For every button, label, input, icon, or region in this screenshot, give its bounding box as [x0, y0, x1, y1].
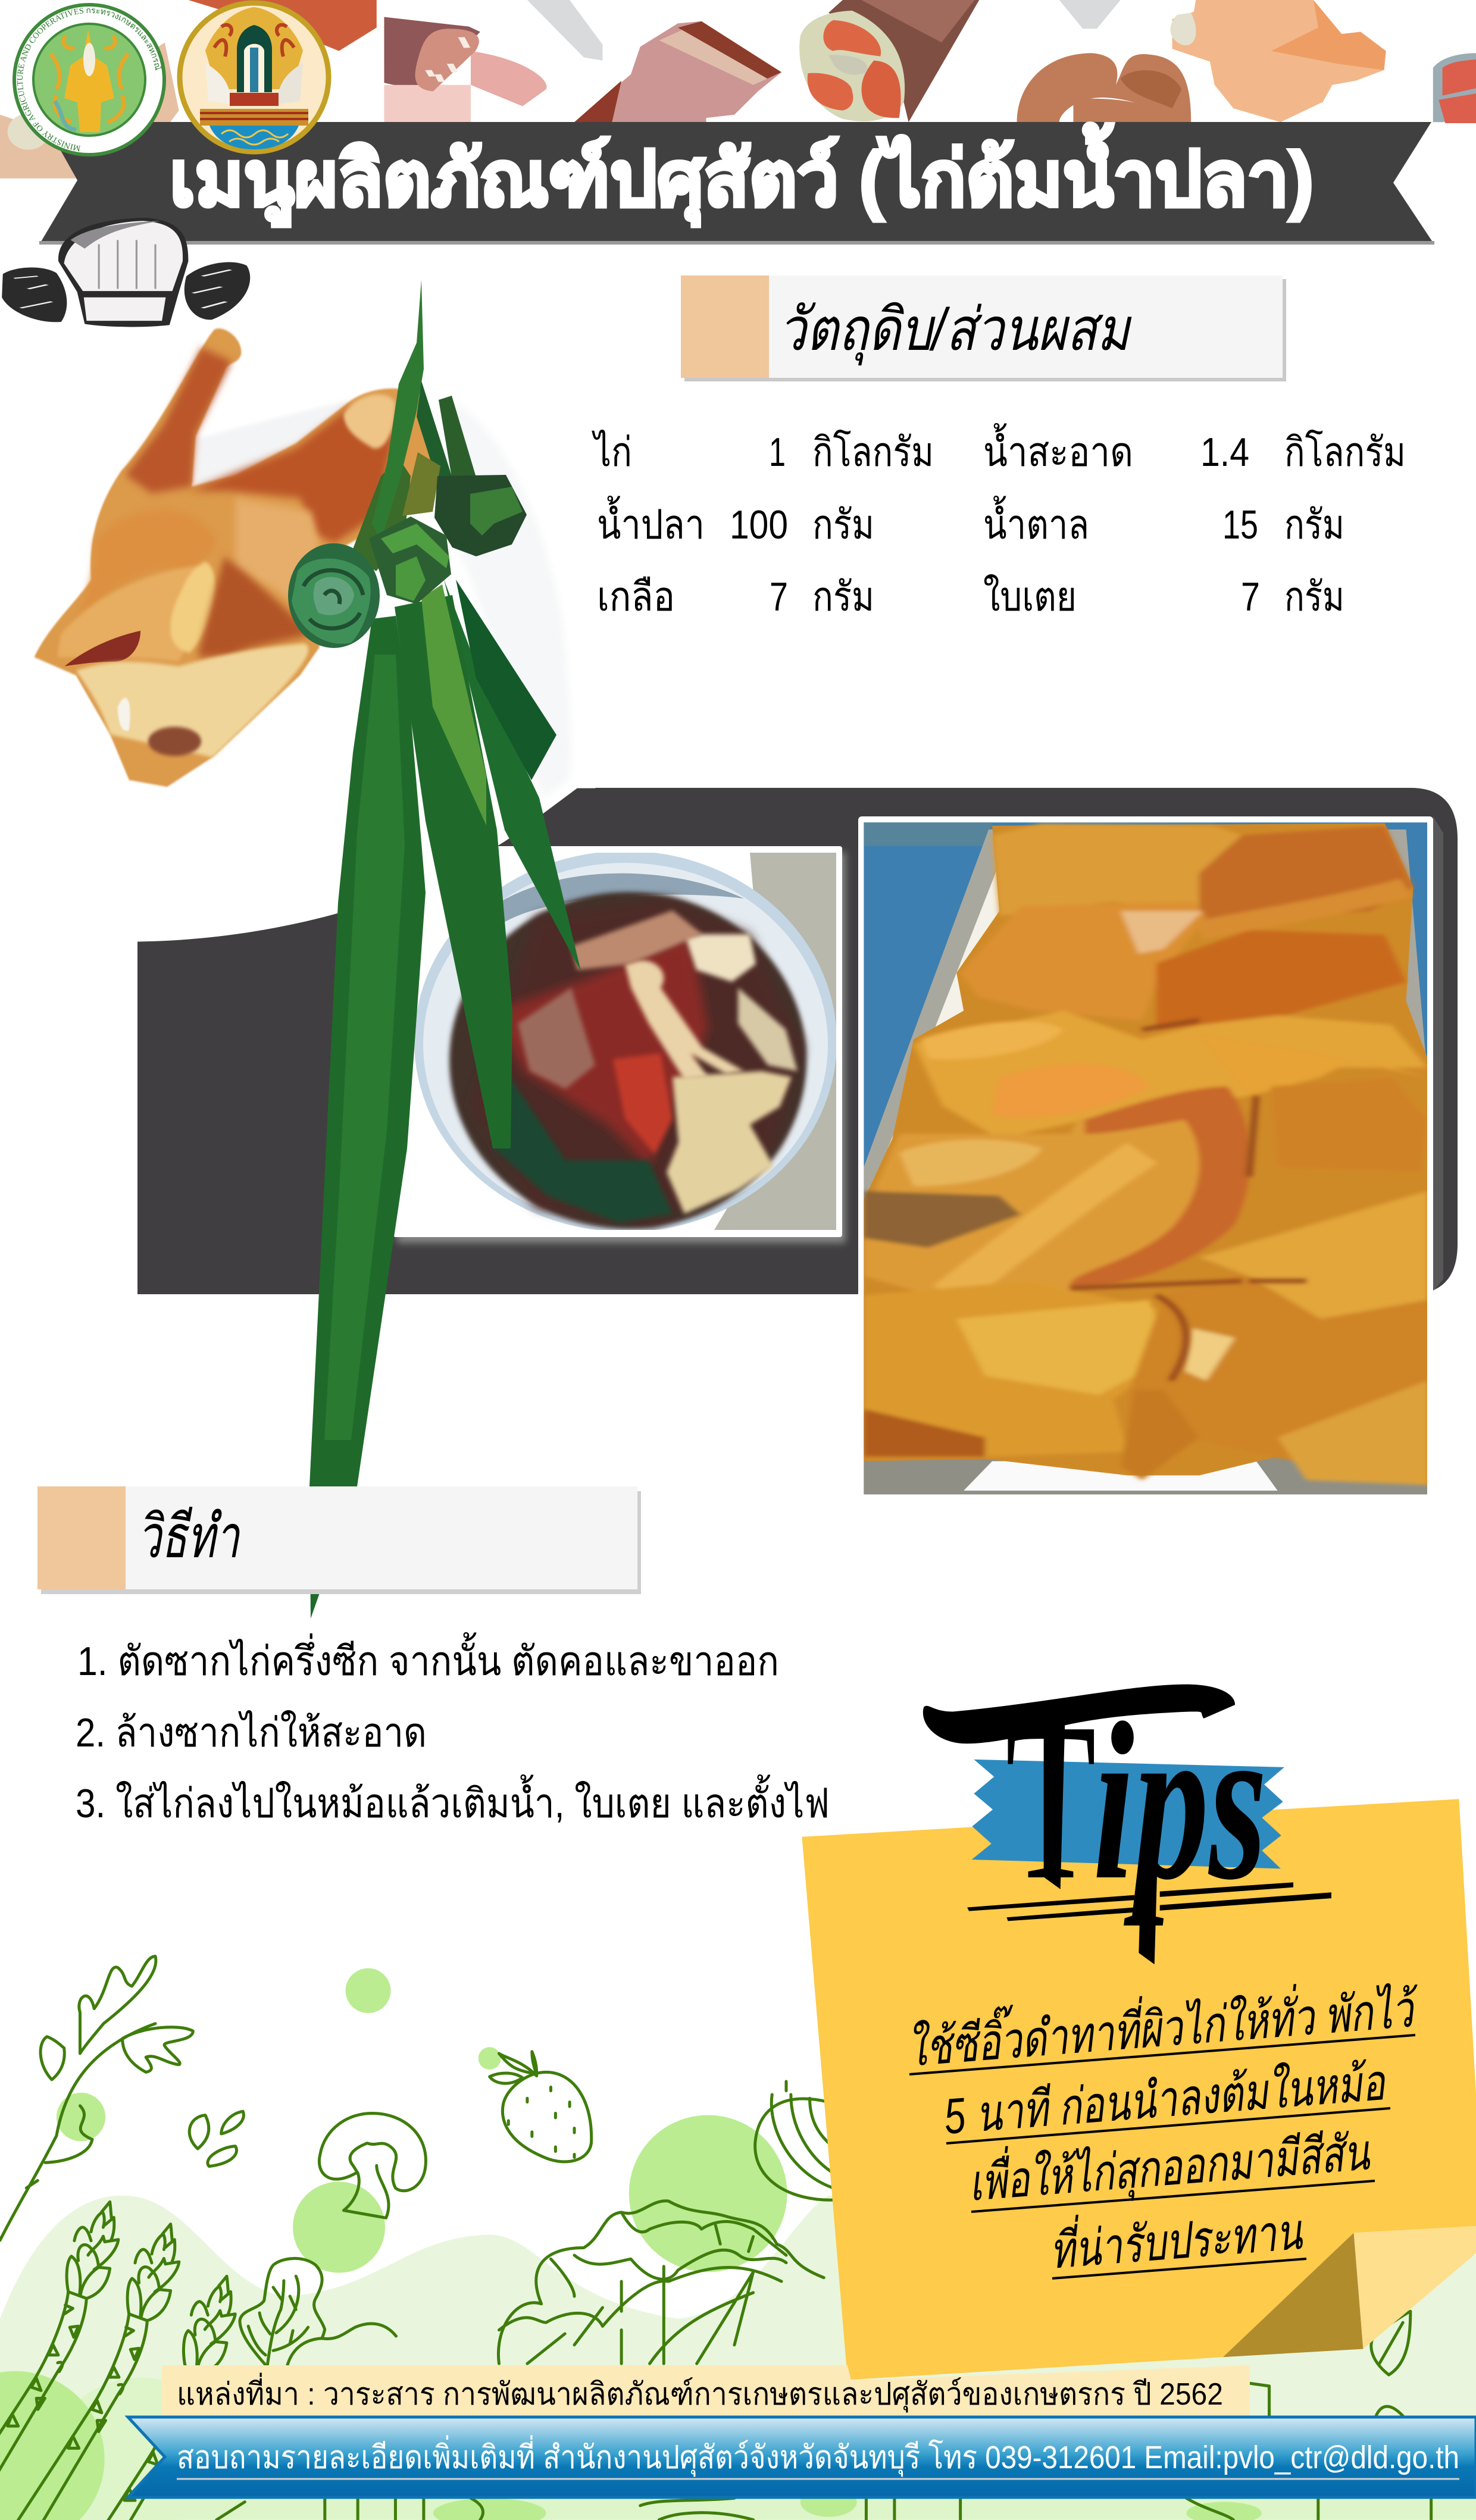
method steps: 2. ล้างซากไก่ให้สะอาด [76, 1710, 427, 1755]
boiled chicken [34, 328, 437, 787]
title banner [39, 122, 1434, 245]
panel: method heading: วิธีทำ [137, 1504, 240, 1570]
icon: right steak [185, 262, 250, 320]
ingredients table: น้ำตาล [983, 496, 1089, 547]
panel: dark photo backdrop [137, 788, 1458, 1294]
logo: ministry of agriculture: MINISTRY OF AGRICULTURE AND COOPERATIVES กระทรวงเกษตรและสหกรณ์ [17, 8, 162, 151]
vegetable line art [0, 1956, 1431, 2520]
panel: ingredients heading [681, 276, 1286, 381]
top stems [351, 280, 476, 571]
method steps: 1. ตัดซากไก่ครึ่งซีก จากนั้น ตัดคอและขาออก [77, 1632, 779, 1684]
ingredients table: 100 [730, 502, 788, 547]
asparagus and spinach line art [0, 2202, 396, 2520]
long left leaf [309, 616, 426, 1619]
ingredients table [592, 423, 1406, 619]
ingredients table: กรัม [812, 502, 874, 547]
pandan knots [288, 475, 527, 648]
ingredients table: 7 [1241, 574, 1260, 619]
chef hat with steaks [2, 218, 250, 327]
source bar [162, 2365, 1250, 2416]
ingredients table: 1 [769, 430, 786, 475]
title text: เมนูผลิตภัณฑ์ปศุสัตว์ (ไก่ต้มน้ำปลา) [170, 123, 1314, 227]
ingredients table: น้ำปลา [597, 496, 705, 547]
icon: chef hat [58, 218, 188, 327]
plate shading [437, 402, 571, 799]
pot of chicken photo [393, 846, 842, 1237]
header meat illustrations [0, 0, 1476, 179]
green blobs [0, 1968, 1262, 2520]
logo: department of livestock [180, 3, 329, 152]
ingredients table: กรัม [1284, 574, 1344, 619]
ingredients table: 1.4 [1200, 430, 1249, 475]
chicken mass [864, 824, 1427, 1485]
tips heading: Tips [1005, 1676, 1267, 1927]
center leaf [395, 595, 512, 1148]
pandan leaves with knots [288, 280, 581, 1619]
panel: method heading [37, 1486, 641, 1594]
plate with boiled chicken [0, 328, 595, 941]
fried chicken tray photo [858, 816, 1443, 1500]
ingredients table: กิโลกรัม [812, 429, 934, 475]
ingredients table: ไก่ [592, 429, 632, 475]
method steps: 3. ใส่ไก่ลงไปในหม้อแล้วเติมน้ำ, ใบเตย และตั้งไฟ [76, 1774, 830, 1826]
ingredients table: เกลือ [597, 574, 675, 619]
ingredients table: 15 [1222, 502, 1258, 547]
light green hills [0, 1956, 1476, 2520]
folded corner flap [1354, 2226, 1476, 2349]
blue tape [972, 1760, 1284, 1868]
dark right leaf [456, 580, 556, 780]
white plate [0, 400, 595, 941]
thin right leaf [444, 580, 581, 971]
folded corner shadow [1223, 2233, 1363, 2357]
vegetable background [0, 1956, 1476, 2520]
tips body text: ที่น่ารับประทาน [1047, 2197, 1305, 2279]
light leaf [421, 584, 486, 825]
method steps [76, 1632, 830, 1826]
ingredients table: 7 [770, 574, 788, 619]
source bar: แหล่งที่มา : วาระสาร การพัฒนาผลิตภัณฑ์การเกษตรและปศุสัตว์ของเกษตรกร ปี 2562 [177, 2372, 1223, 2413]
contact ribbon [128, 2417, 1476, 2497]
panel: ingredients heading: วัตถุดิบ/ส่วนผสม [778, 296, 1132, 366]
icon: left steak [2, 267, 67, 322]
ingredients table: กิโลกรัม [1284, 429, 1406, 475]
tips body text [905, 1973, 1422, 2279]
ingredients table: กรัม [1284, 502, 1344, 547]
tips swash and lines [923, 1685, 1331, 1964]
panel: tips sticky note [802, 1685, 1476, 2380]
note paper [802, 1799, 1476, 2380]
ingredients table: ใบเตย [983, 574, 1077, 619]
ingredients table: น้ำสะอาด [983, 423, 1133, 475]
ingredients table: กรัม [812, 574, 874, 619]
